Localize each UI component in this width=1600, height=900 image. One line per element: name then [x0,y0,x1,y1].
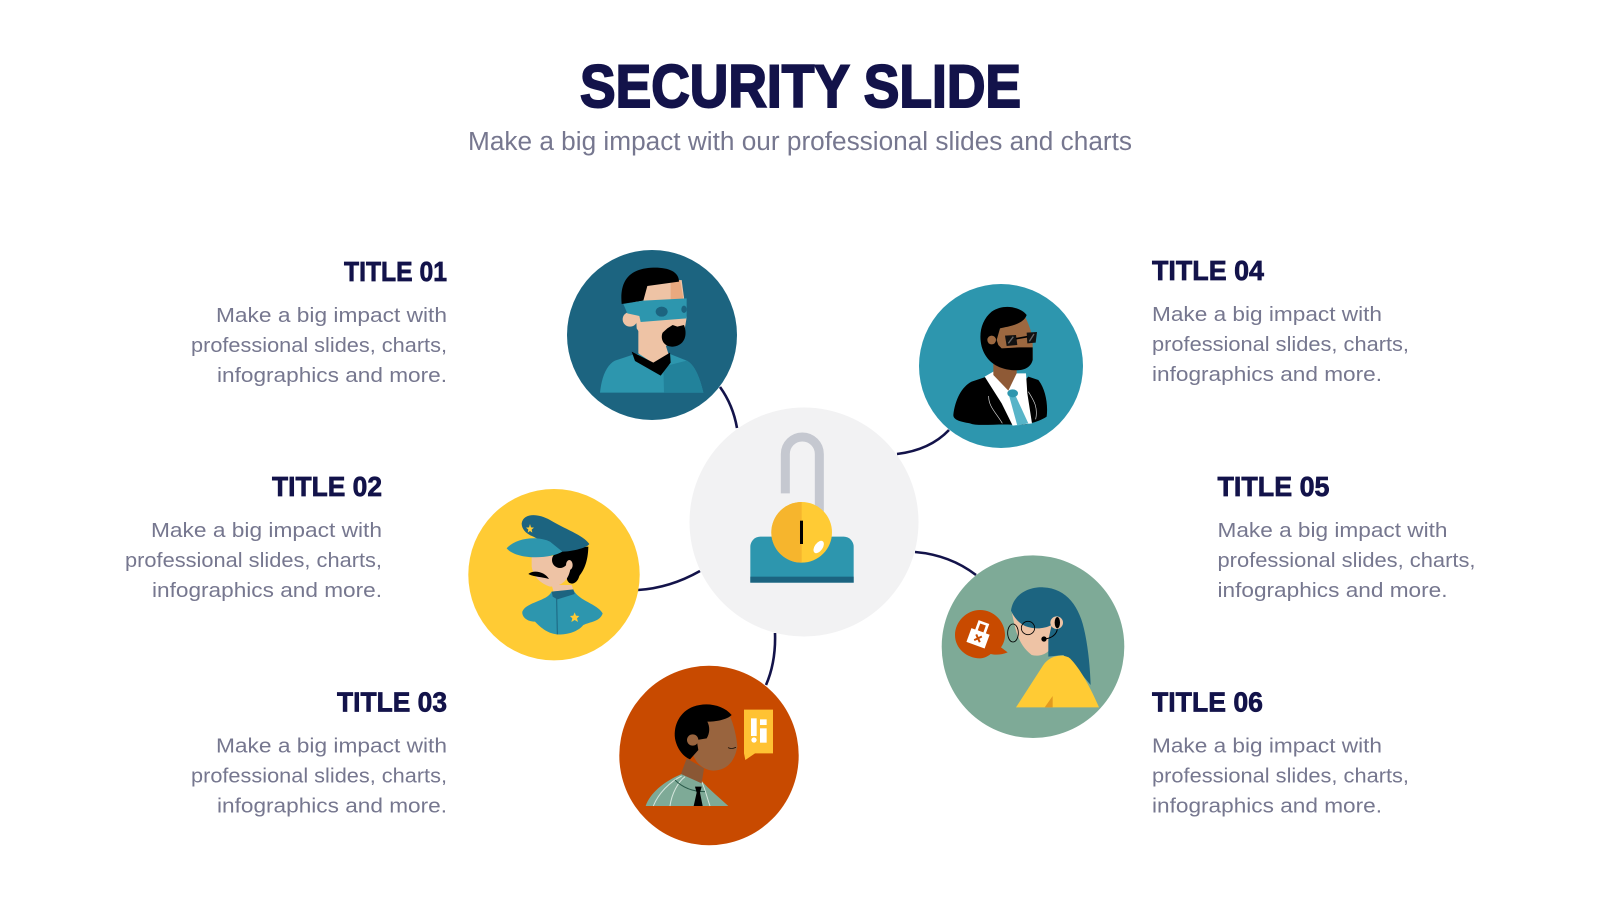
text block: title 02 [125,471,382,602]
text block: title 06: Make a big impact with [1152,734,1382,758]
text block: title 01: TITLE 01 [344,256,447,287]
text block: title 06: infographics and more. [1152,794,1382,818]
text block: title 01 [191,256,447,387]
central padlock [690,408,918,636]
text block: title 03: professional slides, charts, [191,764,447,788]
avatar: woman with headset [942,555,1124,738]
text block: title 01: Make a big impact with [216,304,447,327]
connector lines [638,387,976,685]
text block: title 03: TITLE 03 [337,686,447,718]
avatar: police officer [468,489,640,660]
text block: title 02: professional slides, charts, [125,549,382,572]
text block: title 05: professional slides, charts, [1218,549,1476,572]
text block: title 05: infographics and more. [1218,579,1448,602]
text block: title 04: TITLE 04 [1152,255,1265,286]
text block: title 06: professional slides, charts, [1152,764,1409,788]
title: SECURITY SLIDE [580,53,1021,120]
text block: title 03 [191,686,447,818]
text block: title 03: infographics and more. [217,794,447,818]
avatar: man with alert bubble [619,666,799,845]
subtitle: Make a big impact with our professional slides and charts [468,128,1132,156]
avatar: masked thief [567,250,737,420]
text block: title 06: TITLE 06 [1152,686,1263,718]
text block: title 02: Make a big impact with [151,519,382,542]
text block: title 05: Make a big impact with [1218,519,1448,542]
text block: title 04: infographics and more. [1152,363,1382,386]
text block: title 05: TITLE 05 [1218,471,1330,502]
text block: title 02: TITLE 02 [272,471,382,502]
text block: title 01: professional slides, charts, [191,334,447,357]
text block: title 01: infographics and more. [217,364,447,387]
text block: title 03: Make a big impact with [216,734,447,758]
text block: title 04: professional slides, charts, [1152,333,1409,356]
avatar: agent with sunglasses [919,284,1083,448]
text block: title 04 [1152,255,1409,386]
text block: title 05 [1218,471,1476,602]
text block: title 02: infographics and more. [152,579,382,602]
text block: title 06 [1152,686,1409,818]
text block: title 04: Make a big impact with [1152,303,1382,326]
